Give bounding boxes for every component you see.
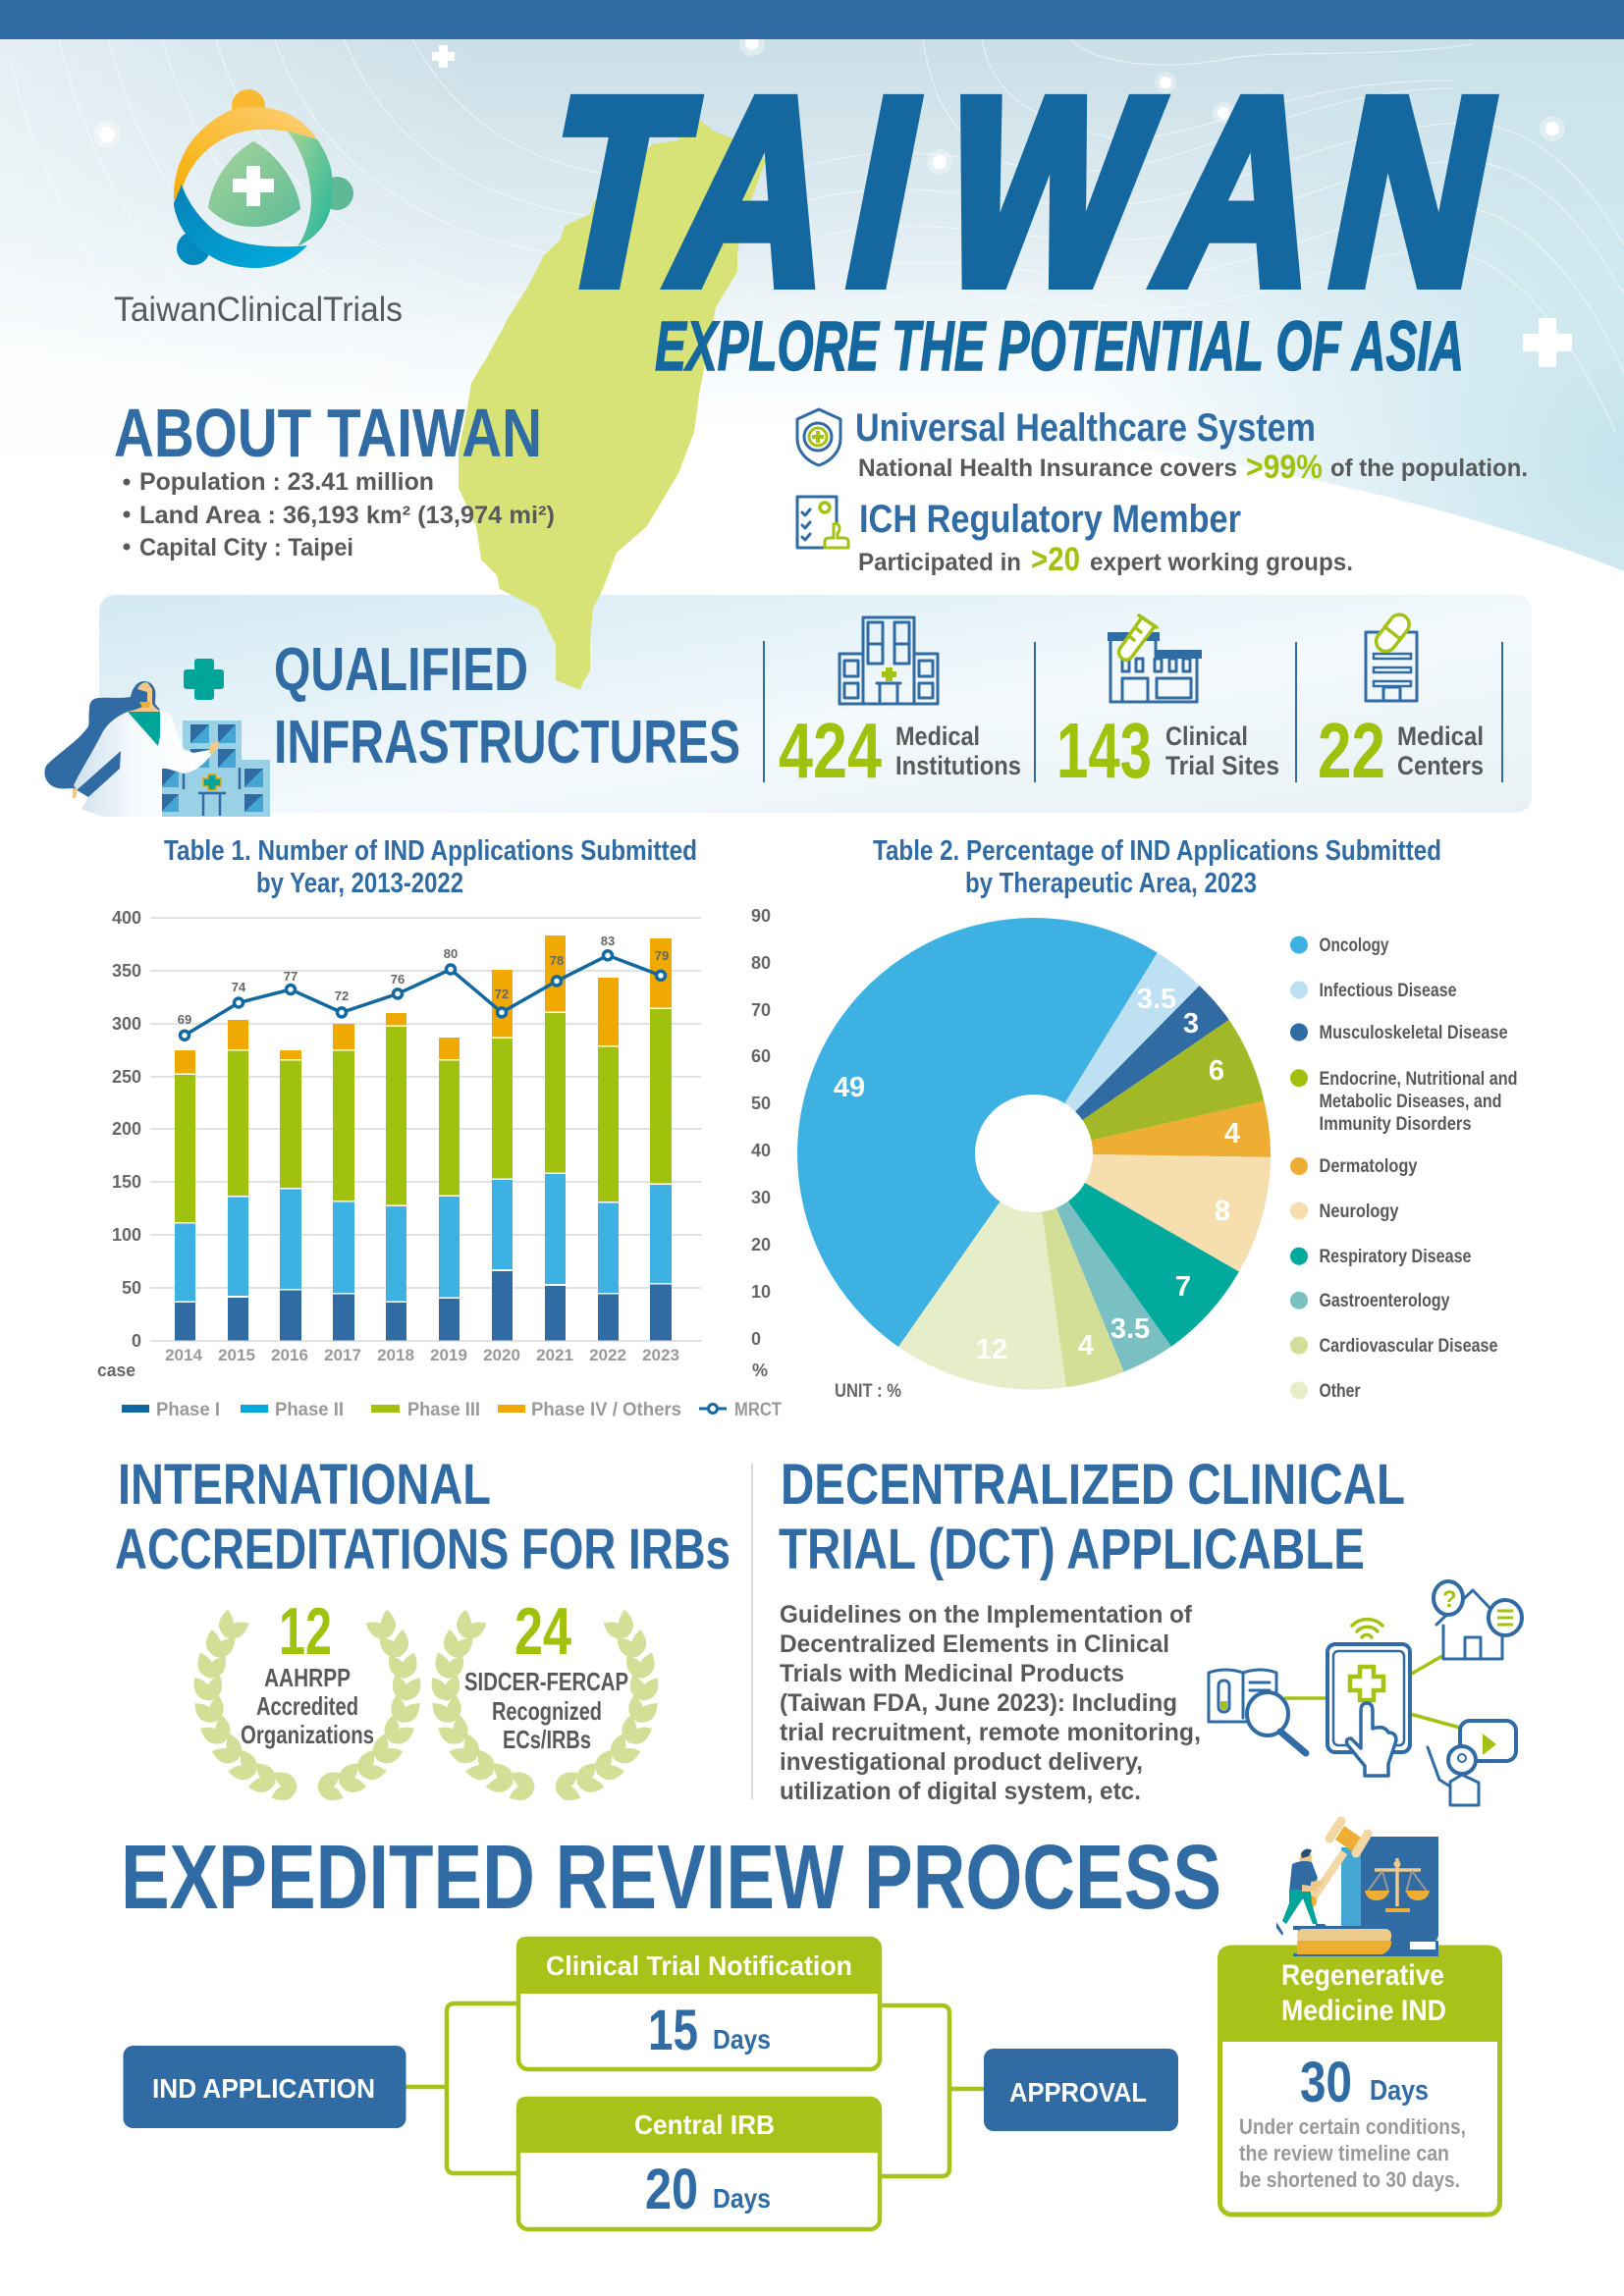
left axis labels: 150 [112,1172,141,1192]
land area: Land Area : 36,193 km² (13,974 mi²) [139,502,555,529]
left axis labels: 100 [112,1225,141,1245]
description: >20 [1031,541,1080,578]
icon: tablet [1327,1644,1410,1776]
slice values: 12 [976,1334,1007,1365]
MRCT value labels: 72 [495,987,509,1001]
label [1397,721,1484,780]
right axis labels [751,906,771,1349]
MRCT value labels: 69 [178,1012,191,1027]
table 1 title [164,835,697,899]
panel: qualified infrastructures background [99,595,1532,813]
number: 143 [1056,707,1152,794]
pie legend: Gastroenterology [1320,1291,1450,1311]
slice values: 3.5 [1110,1313,1150,1345]
guidelines text [780,1601,1201,1805]
left axis labels: 300 [112,1014,141,1034]
right axis labels: 40 [751,1141,771,1160]
pie legend: Dermatology [1320,1156,1418,1177]
heading: TRIAL (DCT) APPLICABLE [779,1518,1365,1581]
flow: approval [984,2049,1178,2131]
illustration: gavel and law books [1276,1821,1438,1942]
title: TAIWAN [525,44,1518,339]
description: >99% [1246,449,1323,486]
panel: decentralized clinical trial [779,1453,1522,1805]
panel: international accreditations [115,1453,731,1807]
heading [274,636,740,776]
year labels: 2014 [165,1346,202,1364]
MRCT line [181,951,666,1040]
flow: central IRB: Days [713,2183,771,2214]
year labels: 2021 [536,1346,573,1364]
pie legend: Other [1320,1381,1361,1402]
label [1165,721,1279,780]
MRCT value labels: 79 [655,948,669,963]
badge: SIDCER-FERCAP [425,1594,665,1807]
flow: central IRB [516,2097,880,2229]
guidelines text: investigational product delivery, [780,1748,1143,1776]
icon: wifi [1352,1620,1382,1637]
table 1 title: by Year, 2013-2022 [256,868,463,899]
logo: Taiwan Clinical Trials [114,89,403,329]
pie legend: Immunity Disorders [1320,1114,1471,1135]
right axis labels: 90 [751,906,771,926]
panel: about Taiwan [114,395,555,561]
chart legend [122,1400,782,1420]
pie chart: therapeutic areas [797,918,1271,1402]
chart legend: Phase IV / Others [531,1400,681,1420]
logo wordmark: TaiwanClinicalTrials [114,291,403,329]
panel: universal healthcare [797,406,1528,486]
flow: clinical trial notification: Days [713,2024,771,2055]
icon: shield [797,409,840,465]
chart legend: Phase III [407,1400,480,1420]
MRCT value labels: 74 [232,980,246,994]
wreath [425,1603,665,1807]
pie legend [1290,935,1518,1402]
table 2 title: Table 2. Percentage of IND Applications Submitted [873,835,1441,867]
guidelines text: Guidelines on the Implementation of [780,1601,1193,1629]
guidelines text: Trials with Medicinal Products [780,1660,1124,1687]
pie legend: Infectious Disease [1320,981,1457,1001]
pie legend: Endocrine, Nutritional and [1320,1069,1518,1090]
year labels: 2022 [589,1346,626,1364]
axis unit: case: case [97,1361,135,1380]
icon: video and presenter [1428,1721,1516,1805]
bars: phase II [175,1174,672,1302]
icon: house with chat bubbles: ? [1442,1586,1457,1613]
guidelines text: trial recruitment, remote monitoring, [780,1719,1201,1746]
wreath [188,1603,427,1807]
MRCT value labels: 78 [550,953,564,968]
heading: INFRASTRUCTURES [274,709,740,776]
axis unit: percent: % [752,1361,768,1380]
left axis labels: 400 [112,908,141,928]
left axis labels: 350 [112,961,141,981]
number: 24 [514,1594,571,1669]
icon: checklist and stamp [797,497,848,548]
heading: ABOUT TAIWAN [114,395,542,471]
right axis labels: 30 [751,1188,771,1207]
panel: regenerative medicine IND [1218,1926,1502,2215]
label: Institutions [895,751,1021,780]
pie legend: Neurology [1320,1201,1399,1222]
stat: medical centers [1318,611,1484,794]
icon: hospital [839,617,938,704]
slice values: 4 [1078,1330,1094,1362]
year labels: 2018 [377,1346,414,1364]
stat: medical institutions [779,617,1021,794]
bars: phase I [175,1271,672,1341]
illustration: DCT network [1209,1581,1522,1805]
label: AAHRPP [264,1663,351,1692]
heading: INTERNATIONAL [118,1453,491,1517]
pie legend: Respiratory Disease [1320,1247,1471,1267]
icon: laboratory building [1108,615,1202,702]
label: Accredited [256,1691,358,1721]
label: Centers [1397,751,1484,780]
number: 22 [1318,707,1385,794]
label: Trial Sites [1165,751,1279,780]
table 1 title: Table 1. Number of IND Applications Submitted [164,835,697,867]
description: expert working groups. [1090,549,1353,576]
description: Participated in [858,549,1021,576]
panel: regenerative medicine IND: Under certain conditions, [1239,2114,1466,2139]
label: Clinical [1165,721,1248,751]
year labels: 2015 [218,1346,255,1364]
label [464,1667,628,1754]
unit label: UNIT : % [835,1381,901,1402]
right axis labels: 70 [751,1000,771,1020]
MRCT value labels [178,934,669,1027]
flow: connectors [406,2003,984,2176]
MRCT value labels: 83 [601,934,615,948]
number: 12 [279,1594,332,1669]
label: Recognized [492,1696,602,1726]
slice values: 3.5 [1137,984,1176,1015]
flow: central IRB: 20 [645,2158,698,2221]
slice values [834,984,1240,1365]
label: Medical [1397,721,1484,751]
label: ECs/IRBs [503,1725,591,1754]
flow: IND application [124,2046,406,2128]
left axis labels: 200 [112,1119,141,1139]
heading: QUALIFIED [274,636,528,704]
stat: clinical trial sites [1056,615,1279,794]
left axis labels: 250 [112,1067,141,1087]
guidelines text: utilization of digital system, etc. [780,1778,1141,1805]
label: Medical [895,721,980,751]
bar chart: IND applications by year [97,906,782,1420]
year labels: 2020 [483,1346,520,1364]
badge: AAHRPP [188,1594,427,1807]
MRCT value labels: 77 [284,969,298,984]
description [858,449,1528,486]
panel: regenerative medicine IND: Medicine IND [1281,1995,1446,2027]
right axis labels: 60 [751,1046,771,1066]
year labels: 2017 [324,1346,361,1364]
flow: clinical trial notification [516,1937,880,2069]
chart legend: Phase I [156,1400,220,1420]
icon: green plus [184,659,224,700]
label [241,1663,374,1749]
panel: infrastructure content [44,611,1502,817]
bars: phase III [175,1009,672,1222]
panel: regenerative medicine IND: 30 [1300,2051,1352,2114]
guidelines text: Decentralized Elements in Clinical [780,1630,1169,1658]
chart legend: MRCT [734,1400,782,1420]
slice values: 49 [834,1072,865,1103]
slice values: 6 [1209,1055,1224,1087]
heading [779,1453,1405,1581]
MRCT value labels: 76 [391,972,405,987]
flow: clinical trial notification: 15 [648,1999,698,2062]
guidelines text: (Taiwan FDA, June 2023): Including [780,1689,1177,1717]
icon: book and magnifier [1209,1670,1306,1753]
right axis labels: 80 [751,953,771,973]
right axis labels: 20 [751,1235,771,1255]
panel: regenerative medicine IND: the review timeline can [1239,2141,1449,2165]
flow: approval: APPROVAL [1009,2077,1147,2108]
description: of the population. [1330,454,1528,482]
panel: ICH regulatory member [797,497,1353,578]
slice values: 8 [1215,1196,1230,1227]
year labels: 2016 [271,1346,308,1364]
year labels [165,1346,679,1364]
background wave [0,30,1624,571]
pie legend: Cardiovascular Disease [1320,1336,1498,1357]
left axis labels: 0 [132,1331,141,1351]
flow: central IRB: Central IRB [634,2109,775,2140]
bars: phase IV and others [175,935,672,1074]
right axis labels: 50 [751,1094,771,1113]
slice values: 4 [1224,1118,1240,1149]
table 2 title [873,835,1441,899]
icon: house with chat bubbles [1434,1581,1522,1659]
right axis labels: 0 [751,1329,761,1349]
panel: regenerative medicine IND: Days [1370,2075,1429,2107]
population: Population : 23.41 million [139,468,434,496]
slice values: 7 [1175,1271,1191,1303]
MRCT value labels: 72 [335,988,349,1003]
capital city: Capital City : Taipei [139,534,353,561]
panel: regenerative medicine IND: Regenerative [1281,1959,1444,1992]
heading: DECENTRALIZED CLINICAL [781,1453,1405,1517]
pie legend: Oncology [1320,935,1389,956]
panel: regenerative medicine IND: be shortened to 30 days. [1239,2167,1460,2192]
slice values: 3 [1183,1008,1199,1040]
MRCT value labels: 80 [444,946,458,961]
heading [115,1453,731,1581]
description [858,541,1353,578]
pie legend: Musculoskeletal Disease [1320,1023,1508,1043]
label: Organizations [241,1720,374,1749]
illustration: doctor and hospital [44,681,270,817]
flow: clinical trial notification: Clinical Trial Notification [546,1950,852,1981]
number: 424 [779,707,882,794]
label [895,721,1021,780]
map of Taiwan [459,120,766,690]
pie legend: Metabolic Diseases, and [1320,1092,1502,1112]
year labels: 2023 [642,1346,679,1364]
right axis labels: 10 [751,1282,771,1302]
table 2 title: by Therapeutic Area, 2023 [965,868,1257,899]
left axis labels [112,908,141,1351]
heading: ACCREDITATIONS FOR IRBs [115,1518,731,1581]
connectors [1284,1656,1460,1728]
heading: expedited review process: EXPEDITED REVIEW PROCESS [121,1826,1221,1928]
chart legend: Phase II [275,1400,344,1420]
heading: ICH Regulatory Member [859,498,1241,541]
flow: IND application: IND APPLICATION [152,2073,375,2104]
label: SIDCER-FERCAP [464,1667,628,1696]
left axis labels: 50 [122,1278,141,1298]
year labels: 2019 [430,1346,467,1364]
top banner bar [0,0,1624,39]
logo mark [174,89,353,268]
icon: medical centre with capsule [1366,611,1417,701]
heading: Universal Healthcare System [855,406,1316,450]
description: National Health Insurance covers [858,454,1237,482]
